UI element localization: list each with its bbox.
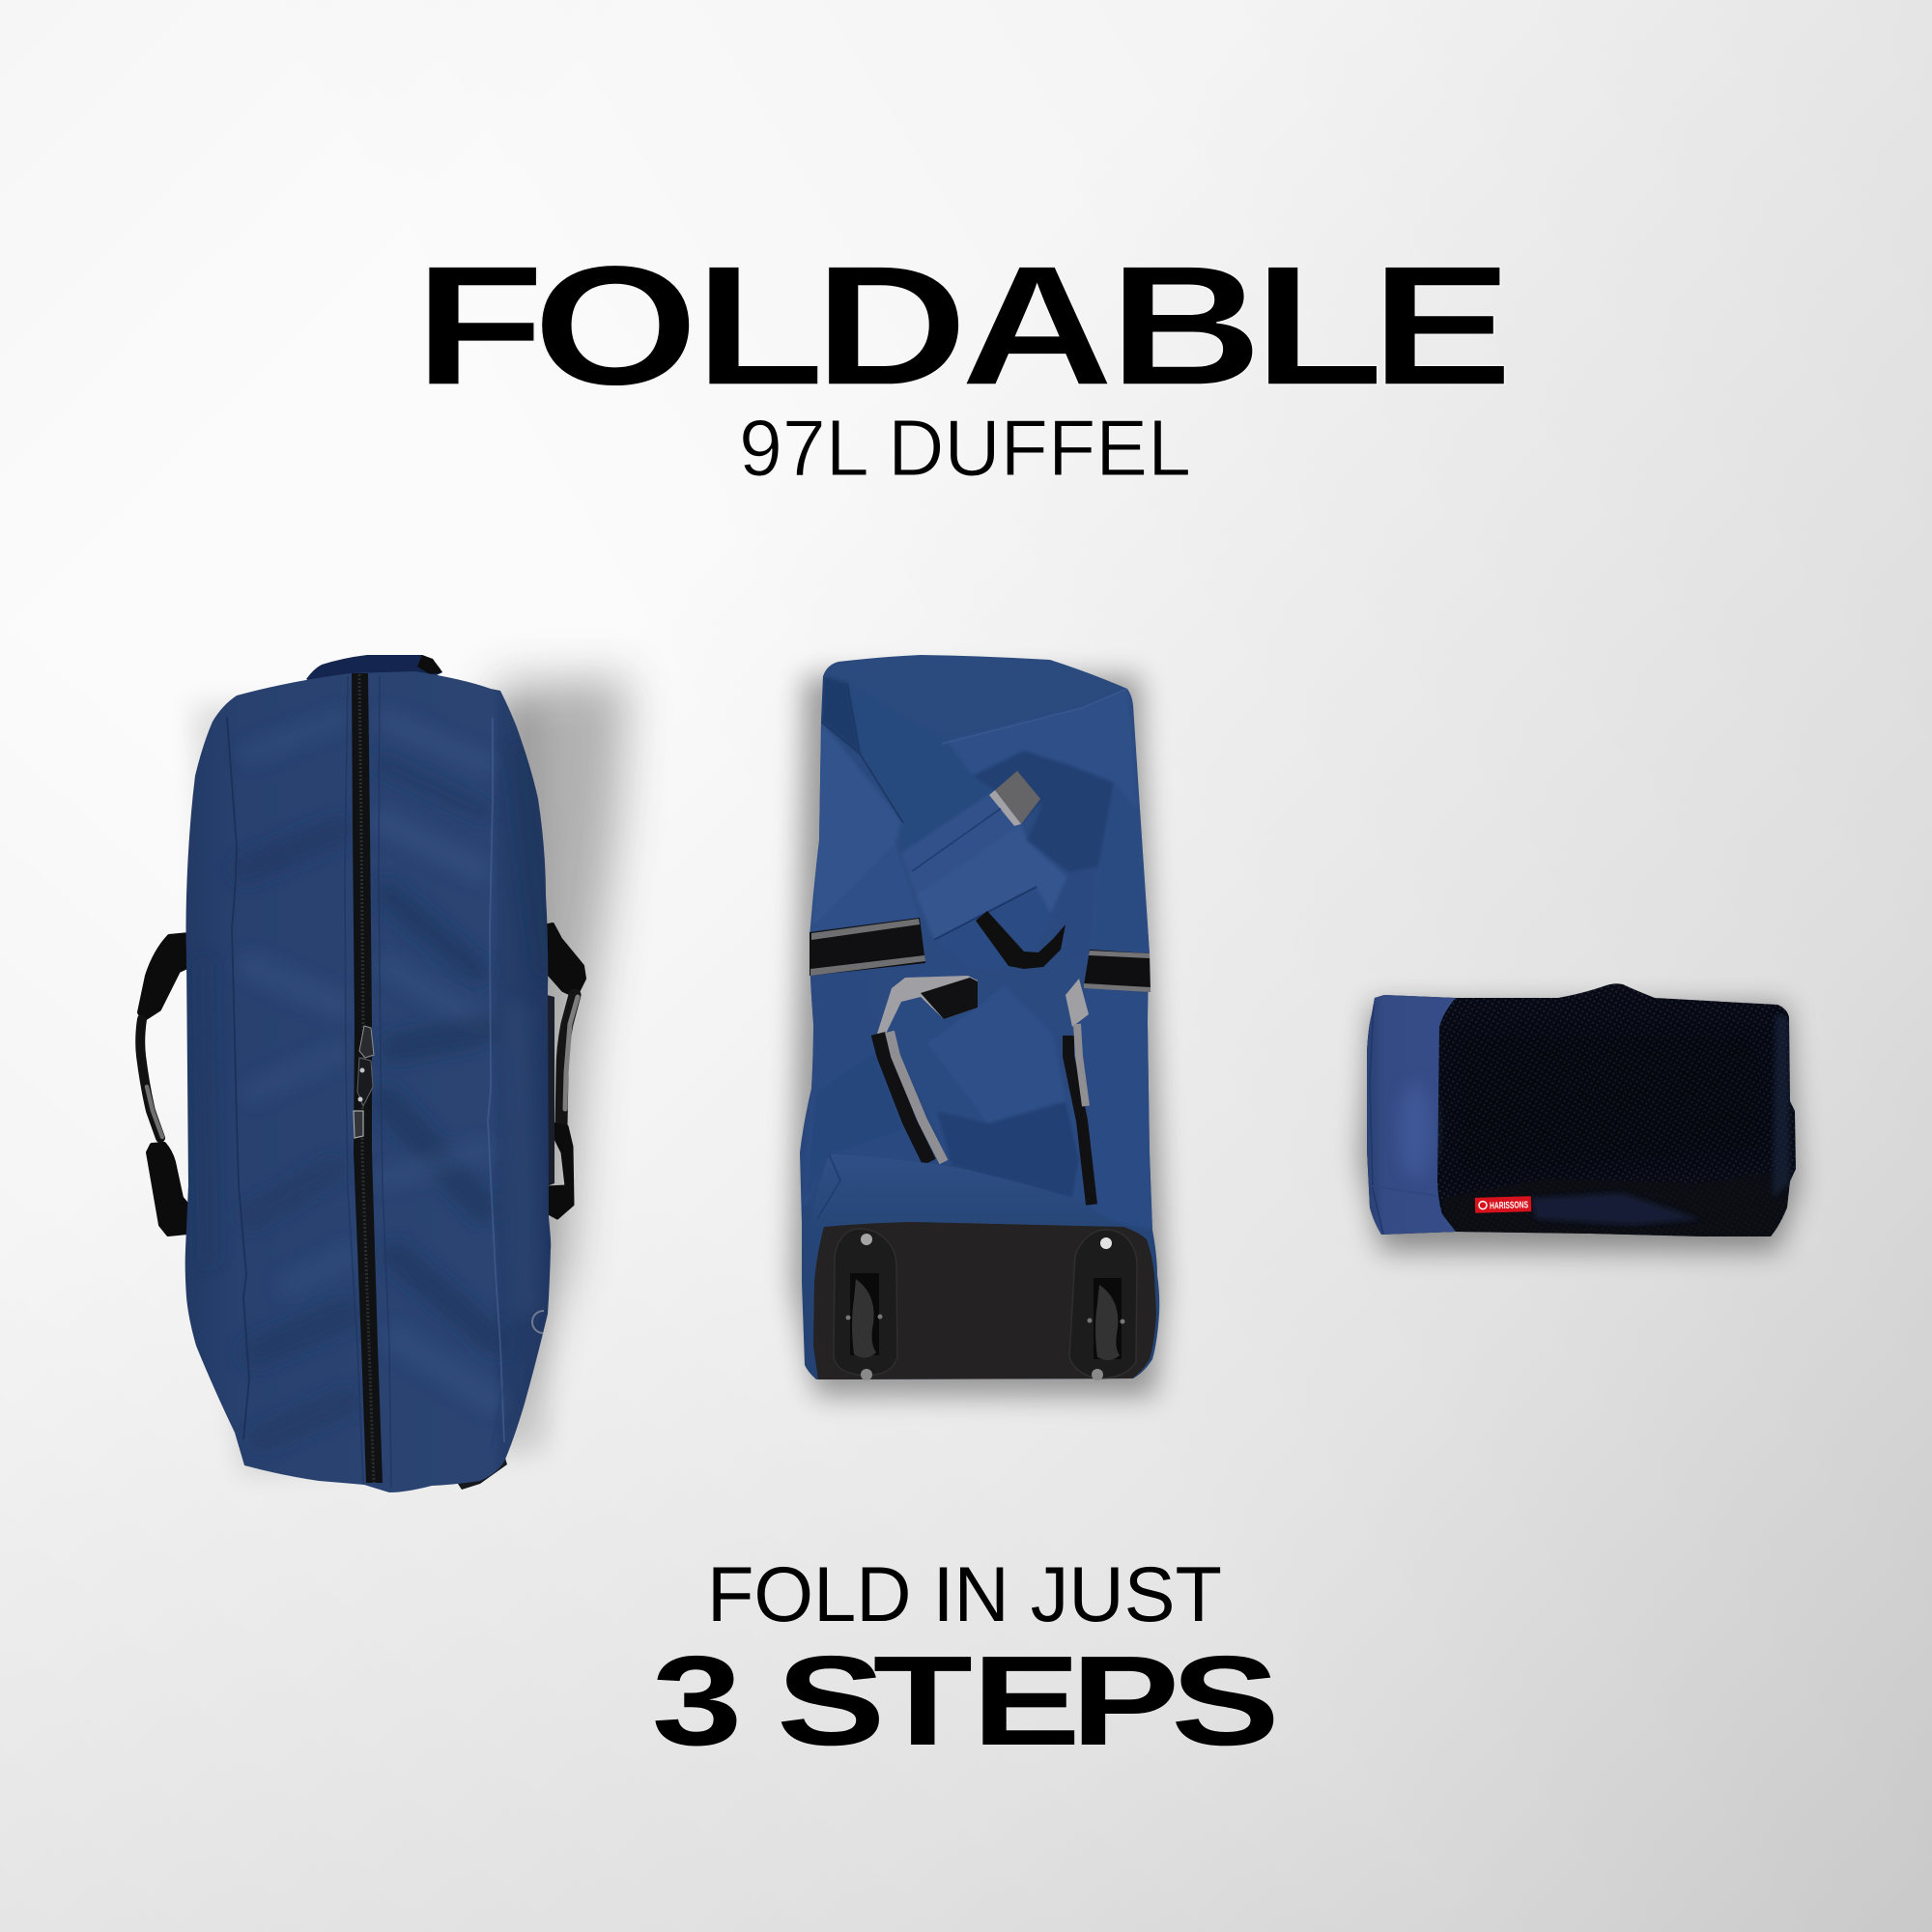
seams xyxy=(227,717,249,1439)
subtitle: 97L DUFFEL: 97L DUFFEL xyxy=(739,403,1191,493)
top handle xyxy=(306,655,442,686)
wheeled base panel xyxy=(813,1222,1156,1379)
bag 2 shadow xyxy=(792,676,1164,1396)
centre strap xyxy=(877,976,978,1034)
brand label xyxy=(1475,1196,1531,1213)
grey corner xyxy=(477,1461,504,1479)
zipper pulls xyxy=(354,1026,374,1138)
left long strap xyxy=(878,1032,944,1162)
flap crease xyxy=(817,1154,840,1219)
bag 1 body xyxy=(185,671,551,1492)
brand label: HARISSONS xyxy=(1490,1200,1528,1211)
right long strap xyxy=(1065,979,1092,1205)
bag 2: emptied, flattened duffel with wheels xyxy=(792,655,1164,1396)
navy fabric band xyxy=(1367,995,1456,1235)
sleeve stitch line xyxy=(912,809,1001,871)
title: FOLDABLE: FOLDABLE xyxy=(414,231,1513,421)
left handle xyxy=(139,934,189,1235)
caption: 3 STEPS: 3 STEPS xyxy=(652,1631,1280,1773)
bottom tip xyxy=(454,1455,507,1490)
bag 2 folds xyxy=(802,676,1152,1230)
bag 1 cast shadow xyxy=(193,678,628,1473)
upper grey strap tab xyxy=(989,771,1040,826)
bag 1 fabric folds xyxy=(203,676,546,1488)
zipper xyxy=(352,673,383,1483)
left wheel assembly xyxy=(834,1229,897,1380)
mesh shading xyxy=(1442,1014,1790,1238)
bag 2 body xyxy=(800,655,1159,1379)
thin black loop handle xyxy=(976,911,1065,969)
right wheel assembly xyxy=(1069,1230,1137,1380)
bag 3 shadow xyxy=(1360,1005,1799,1251)
right black band xyxy=(1084,950,1151,992)
caption: FOLD IN JUST: FOLD IN JUST xyxy=(707,1551,1222,1638)
right handle xyxy=(544,924,584,1218)
band detail xyxy=(1370,1005,1438,1235)
bag 1: fully packed duffel with zipper and handles xyxy=(139,655,628,1492)
mesh pouch xyxy=(1367,983,1796,1236)
front flap xyxy=(811,1154,1147,1239)
top handle black end xyxy=(417,655,442,674)
side logo mark xyxy=(532,1311,544,1333)
left black band xyxy=(810,918,925,976)
bag 3: rolled duffel in mesh pouch xyxy=(1360,983,1799,1251)
